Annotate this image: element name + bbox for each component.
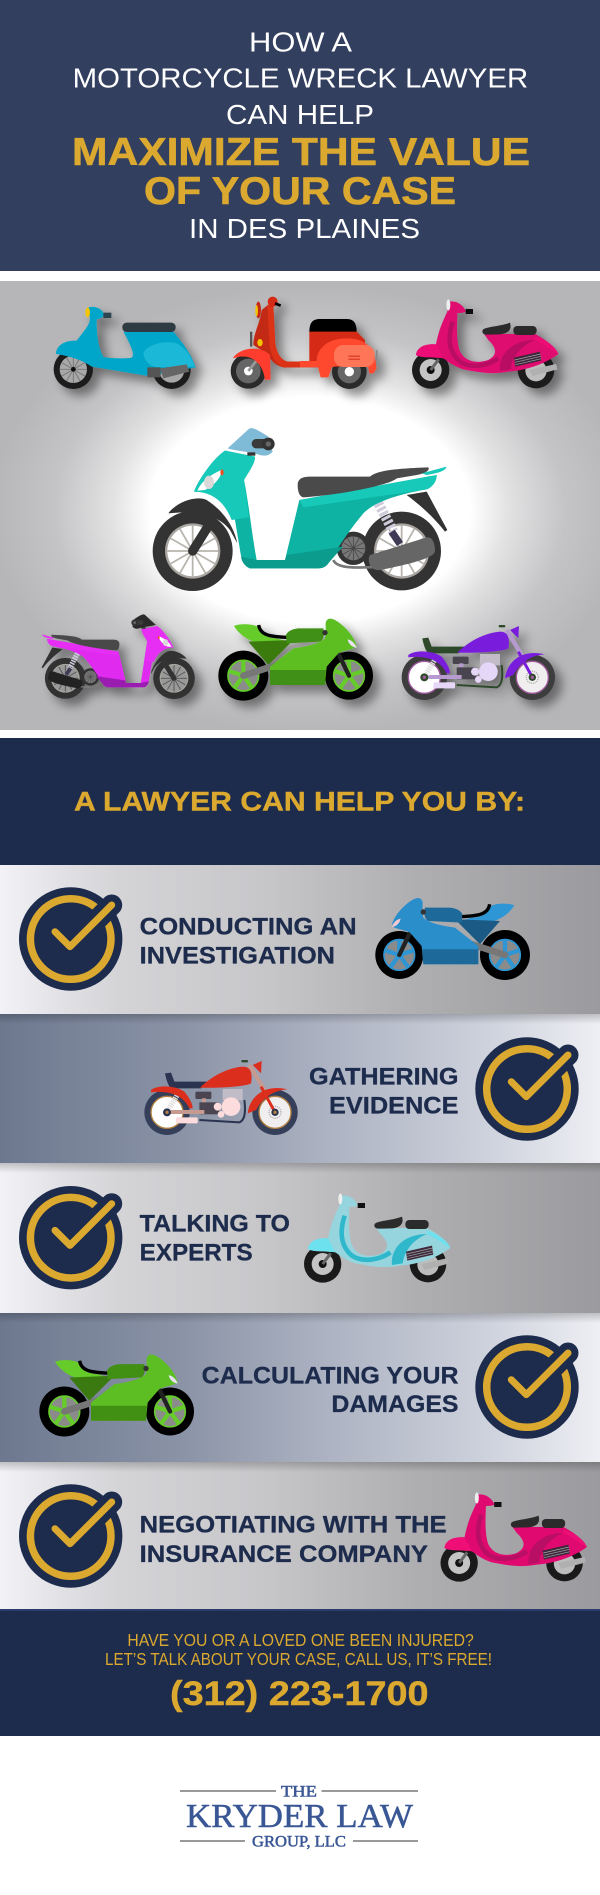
heading: a lawyer can help you by: A LAWYER CAN HELP YOU BY: <box>74 787 525 817</box>
panel: motorcycle gallery <box>0 281 600 730</box>
panel: gathering evidence <box>0 1014 600 1163</box>
icon: aqua scooter <box>304 1193 450 1283</box>
text: negotiating with the insurance company: NEGOTIATING WITH THE <box>140 1511 447 1538</box>
text: talking to experts: EXPERTS <box>140 1240 253 1267</box>
panel: conducting an investigation <box>0 865 600 1014</box>
phone number: (312) 223-1700 <box>170 1675 429 1713</box>
icon: checkmark badge <box>475 1335 579 1439</box>
icon: magenta scooter <box>42 614 195 699</box>
logo: the kryder law group: THE <box>281 1784 317 1801</box>
logo: the kryder law group: KRYDER LAW <box>186 1798 414 1835</box>
text: conducting an investigation: INVESTIGATION <box>140 943 335 970</box>
text: conducting an investigation: CONDUCTING AN <box>140 914 357 941</box>
text: talking to experts: TALKING TO <box>140 1211 290 1238</box>
icon: blue sport bike <box>375 898 530 980</box>
text: negotiating with the insurance company <box>140 1511 447 1568</box>
icon: green sport bike <box>39 1354 194 1436</box>
text: gathering evidence <box>309 1064 458 1120</box>
gold heading line 2: OF YOUR CASE <box>144 170 456 213</box>
text: conducting an investigation <box>140 914 357 970</box>
icon: green sport bike <box>218 619 373 701</box>
text: talking to experts <box>140 1211 290 1267</box>
text: injured question: HAVE YOU OR A LOVED ONE BEEN INJURED? <box>127 1630 474 1650</box>
logo: the kryder law group: GROUP, LLC <box>252 1834 346 1851</box>
text: call us free: LET’S TALK ABOUT YOUR CASE, CALL US, IT’S FREE! <box>105 1649 492 1669</box>
panel: call to action <box>0 1609 600 1736</box>
title line: motorcycle wreck lawyer: MOTORCYCLE WRECK LAWYER <box>73 63 528 94</box>
icon: purple cruiser <box>402 625 555 700</box>
panel: title header <box>0 0 600 271</box>
icon: checkmark badge <box>19 887 122 991</box>
logo: the kryder law group <box>180 1784 418 1851</box>
icon: large teal scooter <box>153 428 447 591</box>
text: gathering evidence: GATHERING <box>309 1064 458 1091</box>
text: calculating your damages <box>202 1362 458 1418</box>
icon: checkmark badge <box>475 1037 579 1141</box>
text: gathering evidence: EVIDENCE <box>329 1093 458 1120</box>
gold heading line 1: MAXIMIZE THE VALUE <box>72 131 530 174</box>
title line: can help: CAN HELP <box>226 99 374 130</box>
panel: talking to experts <box>0 1163 600 1313</box>
title line: how a: HOW A <box>249 27 352 58</box>
icon: checkmark badge <box>19 1484 122 1588</box>
icon: red scooter <box>231 297 378 389</box>
panel: lawyer help heading <box>0 738 600 865</box>
title line: in des plaines: IN DES PLAINES <box>189 213 420 244</box>
icon: pink scooter <box>412 299 558 389</box>
icon: checkmark badge <box>19 1186 122 1289</box>
panel: negotiating with the insurance company <box>0 1462 600 1609</box>
icon: blue scooter <box>54 307 196 389</box>
icon: red cruiser <box>144 1060 298 1135</box>
panel: calculating your damages <box>0 1313 600 1462</box>
text: calculating your damages: DAMAGES <box>331 1391 458 1418</box>
text: calculating your damages: CALCULATING YOUR <box>202 1362 458 1390</box>
text: negotiating with the insurance company: INSURANCE COMPANY <box>140 1541 428 1568</box>
icon: pink scooter <box>440 1492 587 1582</box>
